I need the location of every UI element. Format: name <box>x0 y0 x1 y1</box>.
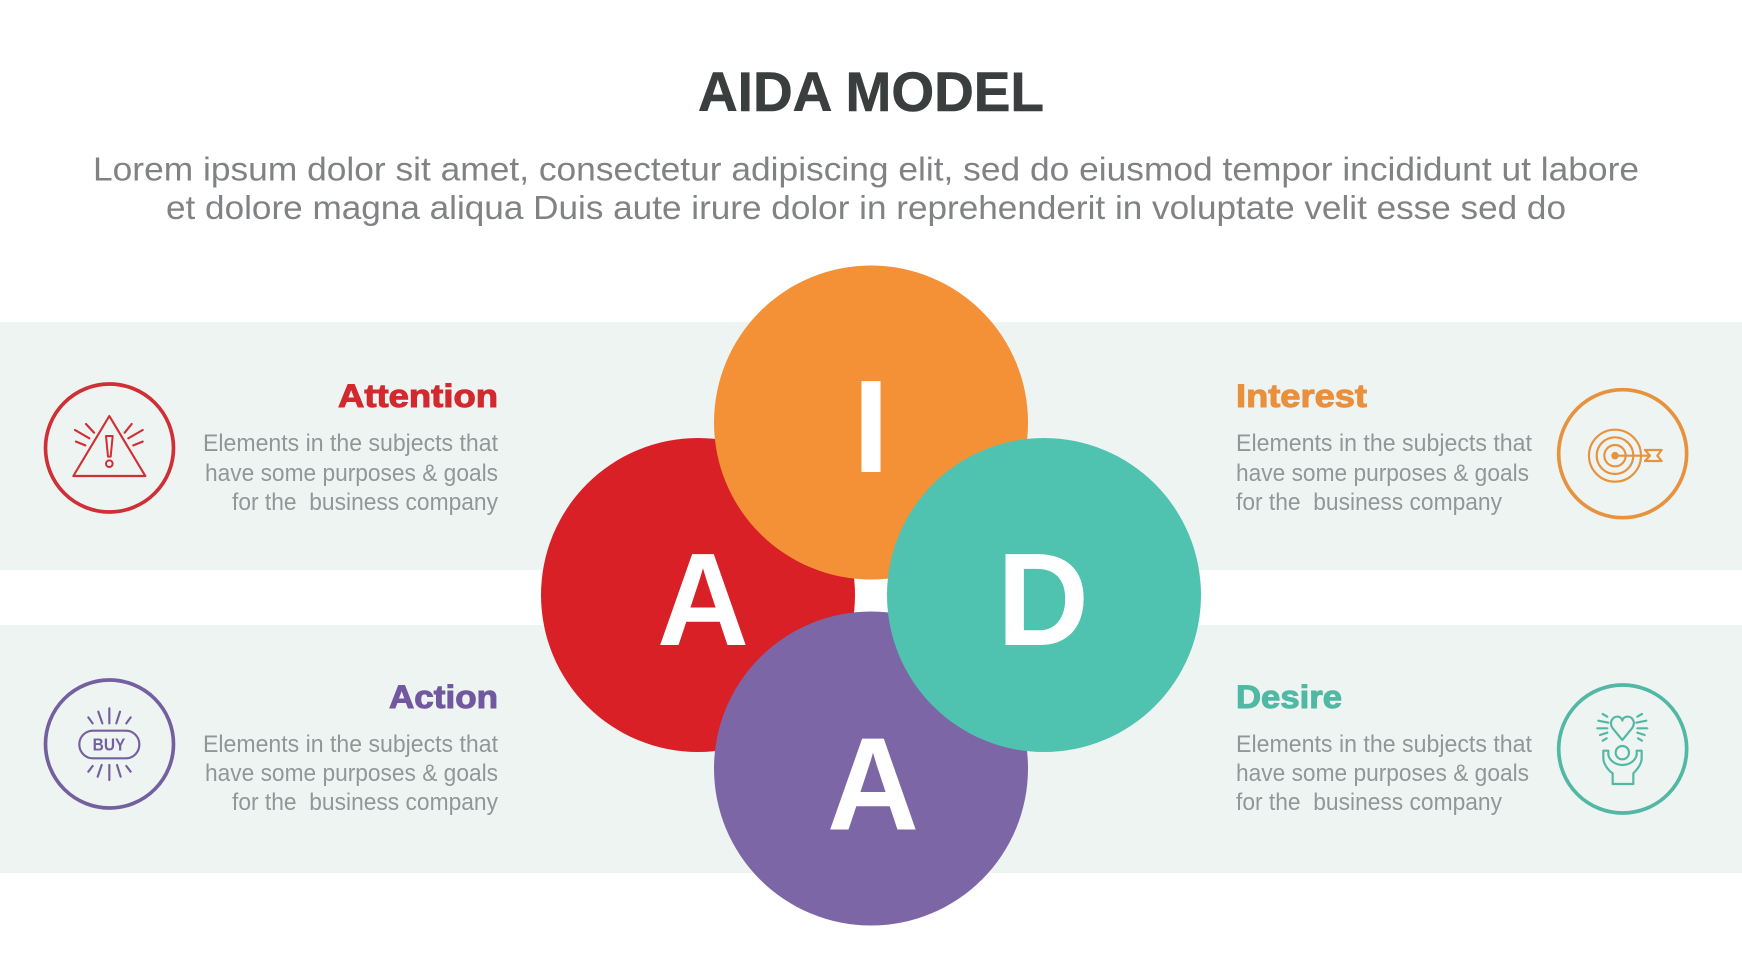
text: Interest description <box>1236 430 1532 516</box>
panel: Desire <box>1236 679 1687 816</box>
circle: Action A <box>714 612 1028 926</box>
heading: Interest: Interest <box>1236 378 1367 414</box>
background band: top row <box>0 322 1742 570</box>
circle: Action A: A <box>827 710 919 858</box>
text: Action description: for the business company <box>232 789 499 816</box>
circle: Attention A: A <box>657 526 749 673</box>
heading: Attention: Attention <box>338 378 498 414</box>
circle: Attention A <box>541 438 855 752</box>
intro text block: Lorem ipsum dolor sit amet, consectetur adipiscing elit, sed do eiusmod tempor incididunt ut labore <box>93 150 1639 188</box>
panel: Action <box>45 679 499 816</box>
text: Attention description: for the business company <box>232 489 499 516</box>
panel: Attention <box>45 378 499 516</box>
icon: target with arrow <box>1559 390 1687 518</box>
text: Action description: have some purposes & goals <box>205 760 498 787</box>
text: Desire description: Elements in the subjects that <box>1236 731 1532 758</box>
circle: Desire D: D <box>997 526 1089 673</box>
panel: Interest <box>1236 378 1687 518</box>
text: Action description: Elements in the subjects that <box>203 731 498 758</box>
circle: Desire D <box>887 438 1201 752</box>
title: AIDA MODEL <box>698 60 1044 123</box>
icon: buy button <box>45 680 173 808</box>
intro text block: et dolore magna aliqua Duis aute irure dolor in reprehenderit in voluptate velit esse sed do <box>166 189 1566 226</box>
text: Attention description: have some purposes & goals <box>205 460 498 487</box>
text: Interest description: have some purposes & goals <box>1236 460 1529 487</box>
text: Interest description: for the business company <box>1236 489 1503 516</box>
text: Desire description <box>1236 731 1532 816</box>
text: Attention description <box>203 430 499 516</box>
text: Desire description: have some purposes & goals <box>1236 760 1529 787</box>
background band: bottom row <box>0 625 1742 873</box>
heading: Desire: Desire <box>1236 679 1342 715</box>
intro text block <box>93 150 1639 226</box>
text: Desire description: for the business company <box>1236 789 1503 816</box>
text: Attention description: Elements in the subjects that <box>203 430 498 457</box>
text: Interest description: Elements in the subjects that <box>1236 430 1532 457</box>
circle: Interest I: I <box>853 353 889 500</box>
heading: Action: Action <box>389 679 498 715</box>
icon: buy button: BUY <box>93 735 125 755</box>
circle: Interest I <box>714 266 1028 580</box>
icon: warning triangle <box>45 384 173 512</box>
icon: person holding heart <box>1559 685 1687 813</box>
text: Action description <box>203 731 499 816</box>
